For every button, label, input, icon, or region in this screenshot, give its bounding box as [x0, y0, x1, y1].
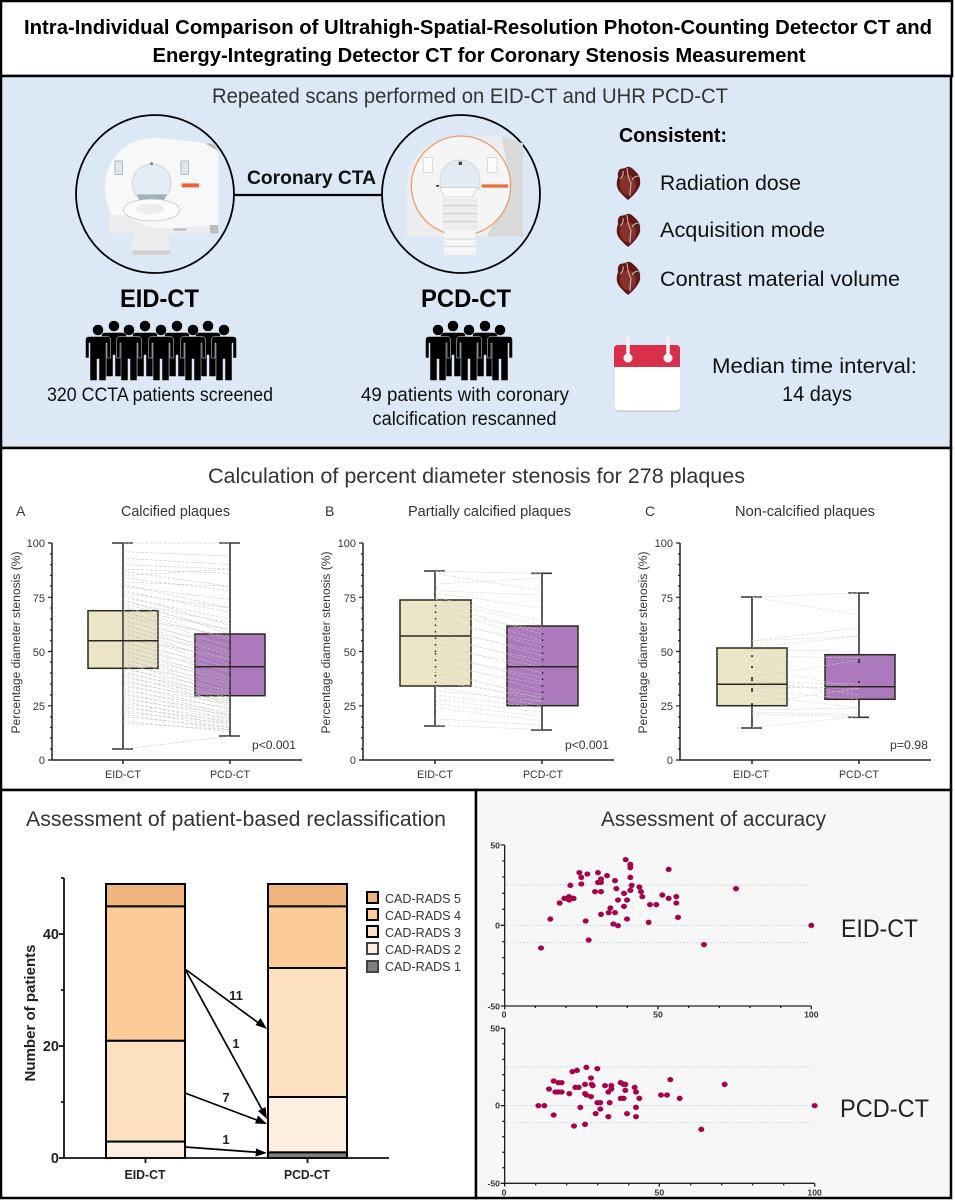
item: acquisition mode: [617, 214, 825, 247]
label: EID-CT: EID-CT: [841, 915, 918, 943]
icon: PCD-CT scanner: [382, 115, 540, 273]
chart A: calcified plaques: A: [16, 503, 26, 519]
scatter plot: EID-CT: 0: [502, 1009, 507, 1019]
chart B: partially calcified plaques: 0: [350, 755, 356, 767]
chart C: non-calcified plaques: PCD-CT: [839, 769, 879, 781]
text: EID-CT patients: 320 CCTA patients screened: [47, 385, 273, 406]
chart C: non-calcified plaques: 100: [655, 538, 673, 550]
chart A: calcified plaques: Percentage diameter stenosis (%): [9, 552, 23, 734]
chart B: partially calcified plaques: Percentage diameter stenosis (%): [319, 552, 333, 734]
axes: PCD-CT: [284, 1167, 330, 1182]
stacked bar: EID-CT: [106, 884, 185, 1158]
axes: 0: [51, 1151, 59, 1167]
chart A: calcified plaques: Calcified plaques: [121, 504, 230, 520]
scatter plot: PCD-CT: 100: [807, 1187, 822, 1197]
icon: people group PCD-CT: [426, 320, 512, 380]
arrow: 11 patients: [185, 969, 267, 1029]
chart A: calcified plaques: EID-CT: [105, 769, 141, 781]
chart C: non-calcified plaques: Non-calcified plaques: [735, 504, 875, 520]
chart B: partially calcified plaques: Partially calcified plaques: [408, 504, 571, 520]
text: median time interval: 14 days: [782, 382, 852, 406]
heading: calculation: Calculation of percent diameter stenosis for 278 plaques: [208, 464, 745, 488]
axes: [22, 878, 389, 1182]
heading: Consistent: Consistent:: [619, 125, 727, 147]
title panel: Energy-Integrating Detector CT for Coronary Stenosis Measurement: [152, 45, 806, 67]
scatter plot: EID-CT: 100: [804, 1009, 819, 1019]
chart A: calcified plaques: 100: [27, 538, 45, 550]
beeswarm dots B: [436, 605, 542, 703]
chart B: partially calcified plaques: B: [325, 503, 334, 519]
heading: PCD-CT: PCD-CT: [421, 285, 511, 313]
label: PCD-CT: PCD-CT: [840, 1095, 929, 1123]
chart C: non-calcified plaques: C: [645, 503, 655, 519]
chart C: non-calcified plaques: [636, 503, 931, 781]
chart B: partially calcified plaques: p<0.001: [565, 738, 609, 752]
text: median time interval: [712, 354, 917, 406]
arrow: 1 patient lower: 1: [222, 1132, 230, 1147]
connector line with Coronary CTA label: Coronary CTA: [247, 168, 376, 189]
arrow: 11 patients: 11: [229, 988, 243, 1003]
chart C: non-calcified plaques: Percentage diameter stenosis (%): [636, 552, 650, 734]
stacked bar: PCD-CT: [268, 884, 347, 1158]
item: acquisition mode: Acquisition mode: [660, 219, 825, 242]
chart B: partially calcified plaques: [319, 503, 614, 781]
chart B: partially calcified plaques: 25: [344, 701, 356, 713]
scatter plot: PCD-CT: -50: [487, 1179, 500, 1189]
text: median time interval: Median time interval:: [712, 354, 917, 378]
panel: study design: [1, 76, 951, 448]
scatter plot: PCD-CT: [487, 1024, 822, 1197]
chart A: calcified plaques: PCD-CT: [210, 769, 250, 781]
scatter plot: PCD-CT: 0: [495, 1101, 500, 1111]
chart A: calcified plaques: 0: [39, 755, 45, 767]
title panel: Intra-Individual Comparison of Ultrahigh-Spatial-Resolution Photon-Counting Detector CT and: [24, 17, 932, 39]
arrow: 1 patient lower: [185, 1132, 267, 1156]
chart A: calcified plaques: 25: [33, 701, 45, 713]
axes: Number of patients: [22, 944, 39, 1082]
chart B: partially calcified plaques: 75: [344, 593, 356, 605]
heading: repeated scans: Repeated scans performed on EID-CT and UHR PCD-CT: [212, 85, 728, 108]
item: radiation dose: [617, 167, 801, 200]
item: contrast material volume: Contrast material volume: [660, 268, 900, 291]
legend: CAD-RADS: CAD-RADS 5: [385, 891, 461, 906]
text: PCD-CT patients: calcification rescanned: [372, 409, 556, 430]
chart A: calcified plaques: 50: [33, 647, 45, 659]
chart B: partially calcified plaques: EID-CT: [417, 769, 453, 781]
item: radiation dose: Radiation dose: [660, 172, 801, 195]
text: PCD-CT patients: [361, 385, 569, 430]
chart B: partially calcified plaques: PCD-CT: [523, 769, 563, 781]
scatter plot: EID-CT: -50: [487, 1001, 500, 1011]
heading: EID-CT: EID-CT: [120, 285, 199, 313]
text: PCD-CT patients: 49 patients with coronary: [361, 385, 569, 406]
beeswarm dots C: [752, 656, 859, 704]
chart B: partially calcified plaques: 100: [338, 538, 356, 550]
axes: 20: [43, 1039, 59, 1055]
chart C: non-calcified plaques: p=0.98: [890, 738, 928, 752]
panel: assessment of accuracy: [476, 790, 951, 1198]
scatter plot: EID-CT: 50: [653, 1009, 663, 1019]
arrow: 7 patients: 7: [222, 1090, 230, 1105]
scatter plot: PCD-CT: 0: [502, 1187, 507, 1197]
legend: CAD-RADS: CAD-RADS 3: [385, 925, 461, 940]
icon: people group EID-CT: [86, 320, 236, 380]
panel: patient-based reclassification: [1, 790, 476, 1198]
axes: EID-CT: [124, 1167, 166, 1182]
icon: EID-CT scanner: [76, 115, 234, 273]
item: contrast material volume: [617, 262, 900, 295]
arrow: 1 patient: [185, 969, 267, 1119]
panel: percent diameter stenosis: [1, 448, 951, 790]
arrow: 1 patient: 1: [232, 1036, 240, 1051]
title panel: [1, 1, 952, 76]
chart C: non-calcified plaques: 0: [667, 755, 673, 767]
scatter plot: EID-CT: [487, 840, 819, 1019]
icon: calendar: [614, 336, 680, 412]
chart A: calcified plaques: 75: [33, 593, 45, 605]
scatter plot: EID-CT: 0: [495, 920, 500, 930]
heading: reclassification: Assessment of patient-based reclassification: [26, 808, 446, 831]
chart B: partially calcified plaques: 50: [344, 647, 356, 659]
chart A: calcified plaques: p<0.001: [252, 738, 296, 752]
legend: CAD-RADS: CAD-RADS 4: [385, 908, 461, 923]
chart C: non-calcified plaques: EID-CT: [733, 769, 769, 781]
chart C: non-calcified plaques: 50: [661, 647, 673, 659]
legend: CAD-RADS: CAD-RADS 1: [385, 959, 461, 974]
chart C: non-calcified plaques: 25: [661, 701, 673, 713]
heading: accuracy: Assessment of accuracy: [601, 808, 827, 831]
scatter plot: PCD-CT: 50: [655, 1187, 664, 1197]
scatter plot: EID-CT: 50: [490, 840, 500, 850]
chart C: non-calcified plaques: 75: [661, 593, 673, 605]
axes: 40: [43, 927, 59, 943]
legend: CAD-RADS: [367, 891, 461, 974]
arrow: 7 patients: [185, 1090, 267, 1124]
legend: CAD-RADS: CAD-RADS 2: [385, 942, 461, 957]
scatter plot: PCD-CT: 50: [490, 1024, 500, 1034]
chart A: calcified plaques: [9, 503, 302, 781]
